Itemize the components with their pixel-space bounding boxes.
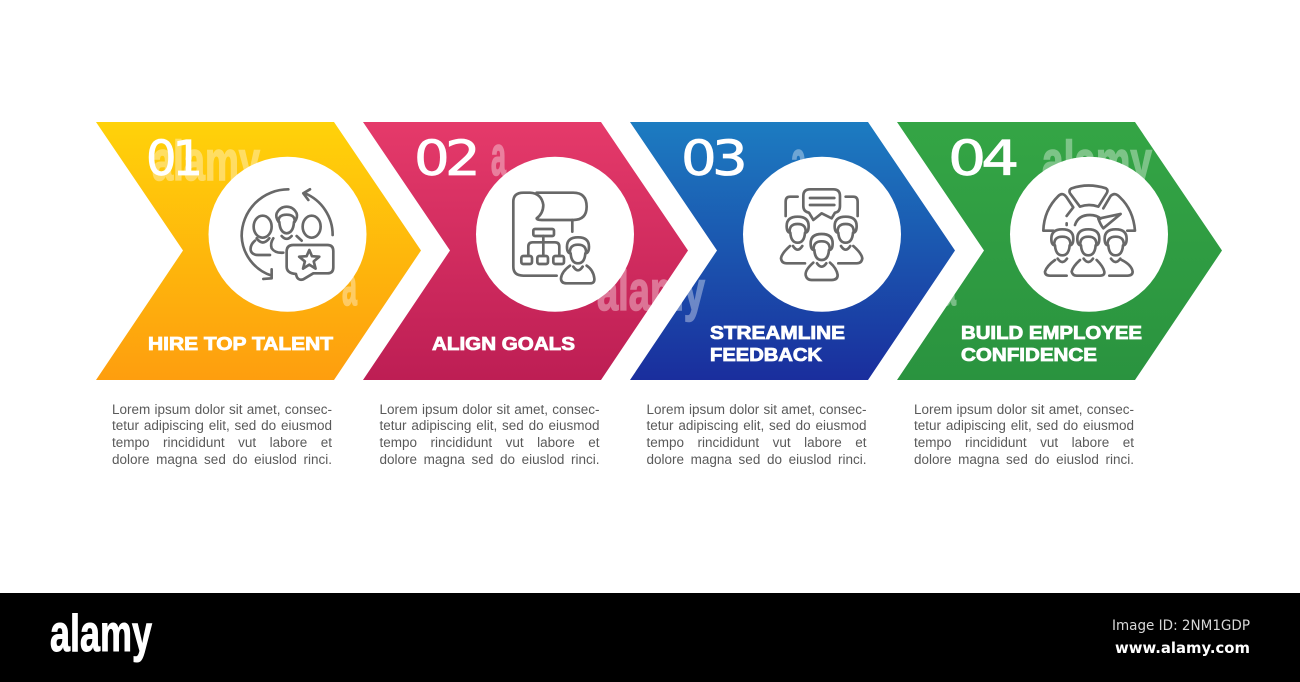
label: HIRE TOP TALENT — [148, 334, 333, 354]
icon: talent with rating star — [242, 189, 333, 280]
arrow: blue chevron — [630, 122, 955, 380]
panel: step 03 streamline feedback: a — [791, 129, 806, 192]
icon circle — [476, 157, 634, 312]
text block: step 03: Lorem ipsum dolor sit amet, consec- — [646, 402, 866, 416]
label: BUILD EMPLOYEE — [961, 323, 1142, 343]
text block: step 03: dolore magna sed do eiuslod rinci. — [646, 452, 866, 467]
arrow: pink chevron — [363, 122, 688, 380]
panel: step 01 hire top talent — [96, 122, 421, 380]
text block: step 01: tetur adipiscing elit, sed do eiusmod — [112, 418, 332, 433]
label: ALIGN GOALS — [432, 334, 575, 354]
text block: step 02 — [380, 402, 600, 467]
image id: Image ID: 2NM1GDP — [1112, 618, 1250, 634]
text block: step 01: tempo rincididunt vut labore et — [112, 435, 332, 450]
label line 2: CONFIDENCE — [961, 345, 1097, 365]
watermark: alamy: alamy — [597, 259, 705, 322]
website: www.alamy.com — [1115, 639, 1250, 657]
icon: gauge with team — [1043, 185, 1135, 276]
text block: step 02: tempo rincididunt vut labore et — [380, 435, 600, 450]
panel: step 04 build employee confidence — [897, 122, 1222, 380]
number 03: 03 — [681, 132, 744, 187]
text block: step 02: Lorem ipsum dolor sit amet, consec- — [380, 402, 600, 416]
text block: step 03: tetur adipiscing elit, sed do eiusmod — [646, 418, 866, 433]
footer bar — [0, 593, 1300, 682]
icon circle — [743, 157, 901, 312]
label line 2: FEEDBACK — [710, 345, 822, 365]
watermark: alamy: alamy — [1042, 129, 1152, 192]
panel: step 01 hire top talent: a — [342, 254, 357, 317]
text block: step 03: tempo rincididunt vut labore et — [646, 435, 866, 450]
icon: team feedback — [781, 189, 862, 280]
watermark: alamy: alamy — [152, 129, 260, 192]
text block: step 01: dolore magna sed do eiuslod rinci. — [112, 452, 332, 467]
footer logo: alamy — [50, 605, 152, 663]
icon: org chart on scroll with person — [513, 193, 594, 283]
number 01: 01 — [146, 131, 200, 187]
label: STREAMLINE — [710, 323, 845, 343]
text block: step 01 — [112, 402, 332, 467]
text block: step 04: Lorem ipsum dolor sit amet, consec- — [914, 402, 1134, 416]
number 02: 02 — [414, 132, 476, 187]
icon circle — [208, 157, 366, 312]
text block: step 01: Lorem ipsum dolor sit amet, consec- — [112, 402, 332, 416]
text: a — [941, 254, 956, 317]
icon circle — [1010, 157, 1168, 312]
panel: step 02 align goals: a — [491, 124, 506, 187]
text block: step 04: tetur adipiscing elit, sed do eiusmod — [914, 418, 1134, 433]
text block: step 04: tempo rincididunt vut labore et — [914, 435, 1134, 450]
panel: step 03 streamline feedback — [630, 122, 956, 380]
number 04: 04 — [948, 131, 1017, 186]
text block: step 04 — [914, 402, 1134, 467]
arrow: yellow chevron — [96, 122, 421, 380]
text block: step 02: dolore magna sed do eiuslod rinci. — [380, 452, 600, 467]
text block: step 04: dolore magna sed do eiuslod rinci. — [914, 452, 1134, 467]
arrow: green chevron — [897, 122, 1222, 380]
text block: step 03 — [646, 402, 866, 467]
panel: step 02 align goals — [363, 122, 705, 380]
text block: step 02: tetur adipiscing elit, sed do eiusmod — [380, 418, 600, 433]
